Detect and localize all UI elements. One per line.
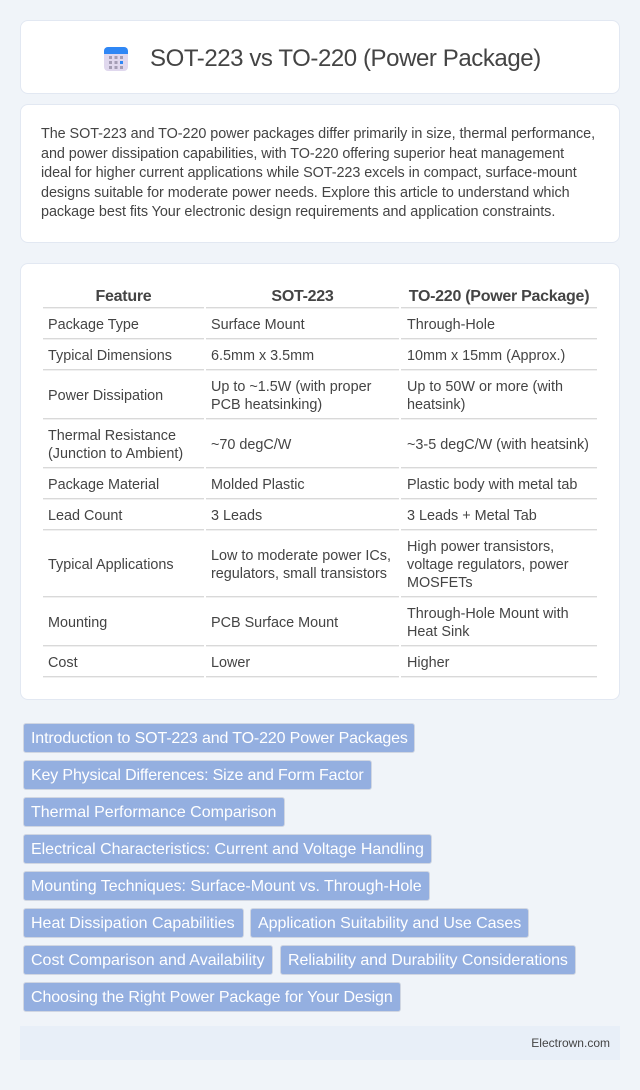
tag list: related topics: Introduction to SOT-223 and TO-220 Power Packages — [31, 730, 408, 747]
comparison table: Up to ~1.5W (with proper — [211, 379, 371, 395]
comparison table: Cost — [48, 655, 78, 671]
comparison table: regulators, small transistors — [211, 566, 387, 582]
panel: comparison table — [20, 263, 620, 700]
text block: introduction: package best fits Your electronic design requirements and application constraints. — [41, 204, 555, 220]
comparison table — [43, 288, 597, 678]
comparison table: (Junction to Ambient) — [48, 446, 183, 462]
comparison table: Feature — [96, 288, 151, 305]
comparison table: Package Material — [48, 477, 159, 493]
comparison table: ~3-5 degC/W (with heatsink) — [407, 437, 589, 453]
comparison table: PCB heatsinking) — [211, 397, 322, 413]
comparison table: Power Dissipation — [48, 388, 163, 404]
comparison table: Through-Hole Mount with — [407, 606, 569, 622]
text block: introduction: designs suitable for moderate power needs. Explore this article to understand which — [41, 185, 570, 201]
text block: introduction: and power dissipation capabilities, with TO-220 offering superior heat management — [41, 146, 564, 162]
comparison table: High power transistors, — [407, 539, 554, 555]
tag list: related topics — [23, 723, 576, 1012]
comparison table: 10mm x 15mm (Approx.) — [407, 348, 565, 364]
comparison table: TO-220 (Power Package) — [409, 288, 589, 305]
comparison table: Plastic body with metal tab — [407, 477, 577, 493]
comparison table: Through-Hole — [407, 317, 495, 333]
comparison table: heatsink) — [407, 397, 465, 413]
comparison table: SOT-223 — [271, 288, 334, 305]
comparison table: 3 Leads — [211, 508, 262, 524]
comparison table: 3 Leads + Metal Tab — [407, 508, 537, 524]
tag list: related topics: Application Suitability and Use Cases — [258, 915, 521, 932]
comparison table: Lead Count — [48, 508, 122, 524]
comparison table: Heat Sink — [407, 624, 469, 640]
comparison table: ~70 degC/W — [211, 437, 291, 453]
panel: introduction — [20, 104, 620, 243]
comparison table: Package Type — [48, 317, 139, 333]
text block: introduction — [41, 126, 595, 220]
tag list: related topics: Electrical Characteristics: Current and Voltage Handling — [31, 841, 424, 858]
comparison table: voltage regulators, power — [407, 557, 569, 573]
comparison table: Thermal Resistance — [48, 428, 176, 444]
comparison table: MOSFETs — [407, 575, 473, 591]
footer credit: Electrown.com — [531, 1036, 610, 1050]
tag list: related topics: Cost Comparison and Availability — [31, 952, 265, 969]
tag list: related topics: Mounting Techniques: Surface-Mount vs. Through-Hole — [31, 878, 422, 895]
tag list: related topics: Key Physical Differences: Size and Form Factor — [31, 767, 364, 784]
tag list: related topics: Thermal Performance Comparison — [31, 804, 276, 821]
comparison table: Molded Plastic — [211, 477, 305, 493]
comparison table: Surface Mount — [211, 317, 305, 333]
footer — [20, 1026, 620, 1060]
comparison table: Typical Dimensions — [48, 348, 172, 364]
title: SOT-223 vs TO-220 (Power Package) — [150, 45, 541, 72]
tag list: related topics: Heat Dissipation Capabilities — [31, 915, 235, 932]
comparison table: Higher — [407, 655, 449, 671]
panel: title header — [20, 20, 620, 94]
text block: introduction: The SOT-223 and TO-220 power packages differ primarily in size, thermal performance, — [41, 126, 595, 142]
tag list: related topics: Choosing the Right Power Package for Your Design — [31, 989, 393, 1006]
comparison table: Lower — [211, 655, 250, 671]
comparison table: Mounting — [48, 615, 107, 631]
comparison table: Up to 50W or more (with — [407, 379, 563, 395]
tag list: related topics: Reliability and Durability Considerations — [288, 952, 568, 969]
comparison table: PCB Surface Mount — [211, 615, 338, 631]
comparison table: Typical Applications — [48, 557, 174, 573]
icon: calendar — [104, 47, 128, 71]
comparison table: 6.5mm x 3.5mm — [211, 348, 314, 364]
text block: introduction: ideal for higher current applications while SOT-223 excels in compact, surface-mount — [41, 165, 577, 181]
comparison table: Low to moderate power ICs, — [211, 548, 391, 564]
